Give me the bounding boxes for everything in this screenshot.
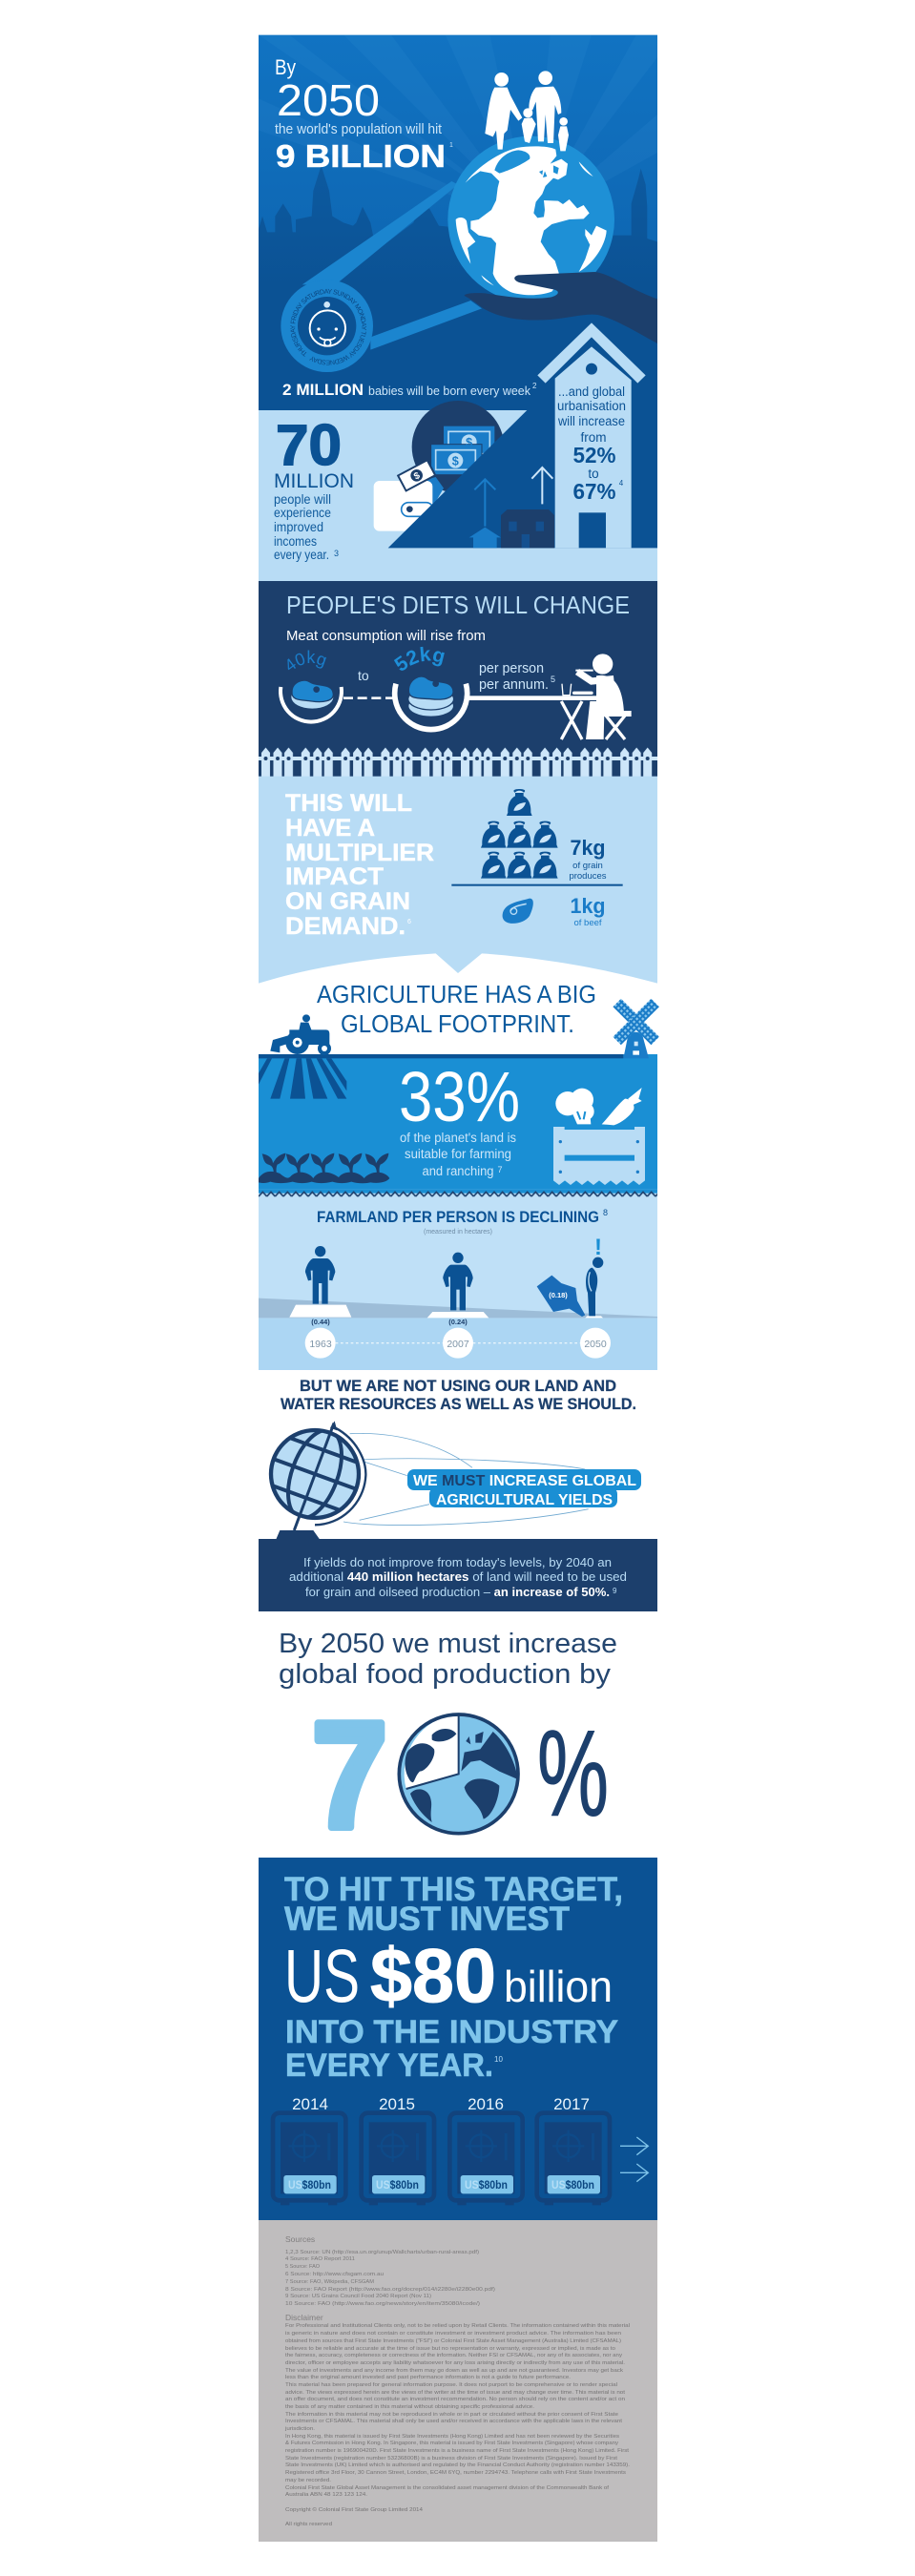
footnote 10: 10 <box>494 2055 503 2064</box>
icon: carrot <box>602 1088 642 1125</box>
source list <box>285 2250 495 2307</box>
hero artwork <box>259 34 657 410</box>
disclaimer text: Australia ABN 48 123 123 124. <box>285 2492 367 2498</box>
dark background <box>259 581 657 747</box>
text: planet's land: 7 <box>497 1165 503 1174</box>
light background and white curve <box>259 777 657 1063</box>
heading: disclaimer: Disclaimer <box>285 2313 323 2322</box>
icon: safe 2014 <box>273 2113 345 2205</box>
text: population: the world's population will hit <box>275 121 443 137</box>
disclaimer text: registration number is 196900420D. First State Investments is a business name of First State Investments (Hong Kong) Limited. First <box>285 2448 629 2454</box>
icon: windmill <box>613 999 659 1058</box>
text: improved incomes: incomes <box>274 534 317 549</box>
dashed link <box>343 695 396 702</box>
value 0.44: (0.44) <box>311 1318 330 1326</box>
stat: us$80 billion: billion <box>504 1962 613 2011</box>
heading: sources: Sources <box>285 2234 315 2244</box>
text: planet's land <box>400 1131 516 1178</box>
heading: land and water: BUT WE ARE NOT USING OUR LAND AND <box>300 1378 616 1395</box>
value pills <box>283 2175 600 2193</box>
stat: 7kg of grain: of grain <box>572 861 603 871</box>
icon: crate <box>553 1127 645 1185</box>
heading: diets: PEOPLE'S DIETS WILL CHANGE <box>286 591 630 619</box>
arrows <box>620 2137 648 2182</box>
text: urbanisation: 4 <box>619 479 624 488</box>
disclaimer text: director, officer or employee accepts any liability whatsoever for any loss arising directly or indirectly from any use of this material. <box>285 2360 625 2366</box>
value labels: US$80bn <box>551 2178 594 2192</box>
value 0.24: (0.24) <box>448 1318 468 1326</box>
figure: 2050 <box>586 1257 603 1316</box>
text: per person per annum: per person <box>479 661 544 676</box>
disclaimer text: an offer document, and does not constitute an investment recommendation. No person should rely on the content and/or act on <box>285 2397 625 2402</box>
percent sign: % <box>537 1706 609 1842</box>
value labels <box>288 2178 594 2192</box>
rights reserved: All rights reserved <box>285 2522 332 2527</box>
disclaimer text: & Futures Commission in Hong Kong. In Singapore, this material is issued by First State Investments (Singapore) whose company <box>285 2441 618 2446</box>
big year: 2050 <box>277 75 380 125</box>
stat: 7kg of grain <box>569 836 607 882</box>
panel: diets <box>259 581 657 747</box>
icon: bank notes: $ <box>452 454 459 467</box>
source list: 6 Source: http://www.cfsgam.com.au <box>285 2272 384 2277</box>
text: urbanisation: from <box>580 430 607 445</box>
heading: land and water: WATER RESOURCES AS WELL AS WE SHOULD. <box>281 1396 636 1413</box>
subheading: (measured in hectares) <box>424 1229 492 1236</box>
icon: ploughed furrows <box>259 1058 346 1099</box>
icon: tree <box>555 1089 594 1124</box>
farmland artwork <box>259 1190 657 1370</box>
source list: 1,2,3 Source: UN (http://esa.un.org/unup/Wallcharts/urban-rural-areas.pdf) <box>285 2250 479 2255</box>
text: urbanisation: ...and global <box>558 384 625 399</box>
source list: 9 Source: US Grains Council Food 2040 Report (Nov 11) <box>285 2294 431 2299</box>
grey background <box>259 2220 657 2542</box>
heading: farmland: FARMLAND PER PERSON IS DECLINING <box>317 1209 599 1226</box>
icon: bank notes: $ <box>466 436 472 449</box>
disclaimer text: For Professional and Institutional Clients only, not to be relied upon by Retail Clients. The information contained within this material <box>285 2323 630 2329</box>
disclaimer text: The information in this material may not be reproduced in whole or in part or circulated without the prior consent of First State <box>285 2412 618 2418</box>
icon: small steak plate <box>281 680 342 722</box>
text: babies: babies will be born every week <box>368 384 530 398</box>
safes and arrows artwork <box>273 2113 648 2205</box>
diet artwork <box>281 654 632 739</box>
globe <box>447 136 614 302</box>
disclaimer text: Investments or CFSAMAL. This material shall only be used and/or received in accordance with the applicable laws in the relevant <box>285 2419 622 2424</box>
stat label: million: MILLION <box>274 470 354 492</box>
disclaimer text: Colonial First State Global Asset Management is the consolidated asset management division of the Commonwealth Bank of <box>285 2485 609 2491</box>
heading: food production: global food production by <box>279 1659 612 1690</box>
icon: wallet: $ <box>412 470 423 483</box>
text: urbanisation <box>557 384 626 504</box>
icon: wallet <box>374 460 444 531</box>
icon: beef steak <box>503 899 533 924</box>
panel: incomes and urbanisation <box>259 322 657 581</box>
heading: hit target <box>284 1871 623 1938</box>
year labels: 2017 <box>553 2095 590 2113</box>
callout: increase yields <box>407 1469 641 1508</box>
icon: family on globe <box>485 71 569 151</box>
source list: 5 Source: FAO <box>285 2264 321 2270</box>
heading: multiplier: HAVE A <box>285 815 375 841</box>
disclaimer text: jurisdiction. <box>284 2426 315 2432</box>
panel: 70 percent <box>279 1629 617 1859</box>
text: urbanisation: 52% <box>572 443 616 467</box>
stat: babies: 2 MILLION <box>282 381 364 399</box>
source list: 10 Source: FAO (http://www.fao.org/news/story/en/item/35080/icode/) <box>285 2301 480 2307</box>
footnote 2: 2 <box>532 382 537 390</box>
text: meat consumption: Meat consumption will rise from <box>286 628 486 644</box>
text: urbanisation: urbanisation <box>557 399 626 413</box>
icon: safe 2017 <box>537 2113 610 2205</box>
icon: pointing hand <box>537 1276 585 1317</box>
panel: population hero <box>259 34 657 410</box>
panel: sources and disclaimer <box>259 2220 657 2542</box>
heading: multiplier: MULTIPLIER <box>285 840 434 866</box>
heading: hit target: TO HIT THIS TARGET, <box>284 1871 623 1908</box>
stat: 7kg of grain: produces <box>569 871 607 882</box>
heading: multiplier: 6 <box>407 919 411 925</box>
panel: diets: 40kg <box>287 651 326 670</box>
year labels: 2050 <box>584 1339 607 1350</box>
icon: globe as 70 percent pie <box>398 1714 519 1835</box>
heading: multiplier: THIS WILL <box>285 790 412 817</box>
heading: agriculture: GLOBAL FOOTPRINT. <box>341 1009 574 1038</box>
year labels <box>292 2095 590 2113</box>
disclaimer text: obtained from sources that First State Investments ("FSI") or Colonial First State Asset Management (Australia) Limited (CFSAMAL) <box>285 2338 621 2344</box>
icon: desk globe and connectors <box>269 1422 589 1539</box>
disclaimer text: less than the original amount invested and past performance information is not a guide to future performance. <box>285 2375 571 2380</box>
disclaimer text: believes to be reliable and accurate at the time of issue but no representation or warranty, expressed or implied, is made as to <box>285 2346 615 2352</box>
year labels: 2016 <box>468 2095 504 2113</box>
source list: 8 Source: FAO Report (http://www.fao.org/docrep/014/i2280e/i2280e00.pdf) <box>285 2287 495 2293</box>
panel: multiplier impact <box>259 777 657 1063</box>
text: urbanisation: to <box>588 467 599 481</box>
callout: increase yields: WE MUST INCREASE GLOBAL <box>413 1473 636 1489</box>
panel: farmland per person <box>259 1190 657 1370</box>
heading: multiplier <box>285 790 434 940</box>
icon: hand holding globe <box>465 272 657 343</box>
stat: us$80 billion <box>284 1933 613 2018</box>
icon: townhouse with arrow <box>501 467 554 548</box>
disclaimer text: State Investments (UK) Limited which is authorised and regulated by the Financial Conduct Authority (registration number 143359). <box>285 2462 630 2468</box>
panel: investment <box>259 1858 657 2220</box>
heading: agriculture: AGRICULTURE HAS A BIG <box>317 980 596 1008</box>
disclaimer text: is generic in nature and does not contain or constitute investment or investment product advice. The information has been <box>285 2331 621 2337</box>
icon: bank notes <box>431 426 494 475</box>
disclaimer text: Registered office 3rd Floor, 30 Cannon Street, London, EC4M 6YQ, number 2294743. Telephone calls with First State Investments <box>285 2470 626 2476</box>
disclaimer text: In Hong Kong, this material is issued by First State Investments (Hong Kong) Limited and has not been reviewed by the Securities <box>285 2434 619 2440</box>
dotted timeline <box>336 1341 580 1345</box>
heading: land and water <box>281 1378 636 1413</box>
heading: multiplier: IMPACT <box>285 863 384 890</box>
disclaimer text <box>284 2323 630 2498</box>
icon: sprouts <box>259 1153 389 1183</box>
stat: us$80 billion: $80 <box>370 1933 496 2018</box>
year labels <box>309 1339 607 1350</box>
text: improved incomes: people will <box>274 492 331 507</box>
stat: 70: 70 <box>276 413 342 477</box>
disclaimer text: This material has been prepared for general information purpose. It does not purport to be comprehensive or to render special <box>285 2382 617 2388</box>
text: improved incomes: experience <box>274 506 331 520</box>
heading: food production <box>279 1629 617 1690</box>
disclaimer text: advice. The views expressed herein are the views of the writer at the time of issue and may change over time. This material is not <box>285 2390 625 2396</box>
stat: 9 billion: 9 BILLION <box>276 138 446 174</box>
text: per person per annum: per annum. <box>479 677 549 693</box>
icon: urbanisation house <box>537 322 646 548</box>
decorative picket fence <box>259 747 657 777</box>
text: improved incomes: improved <box>274 520 323 534</box>
text: planet's land: and ranching <box>422 1164 494 1178</box>
icon: tractor <box>270 1014 331 1055</box>
disclaimer text: the basis of any matter contained in this material without obtaining specific professional advice. <box>285 2404 534 2410</box>
strap from baby ring to globe <box>302 181 482 350</box>
footnote 1: 1 <box>449 142 453 149</box>
value 0.18: (0.18) <box>549 1291 568 1299</box>
source list: 7 Source: FAO, Wikipedia, CFSGAM <box>285 2279 374 2285</box>
copyright: Copyright © Colonial First State Group Limited 2014 <box>285 2506 424 2513</box>
value labels: US$80bn <box>288 2178 331 2192</box>
heading: by 2050: By <box>275 55 296 79</box>
figure: 1963 <box>305 1246 335 1304</box>
footnote 8: 8 <box>603 1208 608 1217</box>
stat: 33%: 33% <box>399 1057 520 1136</box>
text: improved incomes <box>274 492 339 562</box>
stat: 1kg of beef <box>571 894 605 928</box>
stat: us$80 billion: US <box>284 1933 360 2018</box>
text: improved incomes: 3 <box>334 549 339 558</box>
icon: safe 2015 <box>362 2113 434 2205</box>
text: planet's land: of the planet's land is <box>400 1131 516 1145</box>
panel: 440 million hectares: additional 440 million hectares of land will need to be used <box>289 1569 627 1584</box>
panel: 440 million hectares: If yields do not improve from today's levels, by 2040 an <box>303 1555 612 1569</box>
disclaimer text: may be recorded. <box>285 2478 331 2483</box>
year labels: 1963 <box>309 1339 332 1350</box>
text: per person per annum: 5 <box>551 675 555 684</box>
heading: hit target: WE MUST INVEST <box>284 1901 570 1938</box>
callout: increase yields: AGRICULTURAL YIELDS <box>436 1492 613 1508</box>
disclaimer text: State Investments (registration number 53236800B) is a business division of First State Investments (Singapore). Issued by First <box>285 2456 617 2462</box>
stat: 1kg of beef: 1kg <box>571 894 605 918</box>
text: improved incomes: every year. <box>274 548 329 562</box>
year labels: 2007 <box>447 1339 469 1350</box>
divider line <box>451 884 623 886</box>
panel: diets: 52kg <box>394 647 445 671</box>
panel: agriculture footprint <box>259 980 659 1197</box>
panel: yields <box>251 1378 657 1611</box>
exclamation mark: ! <box>594 1235 602 1260</box>
stat: 1kg of beef: of beef <box>573 918 602 928</box>
heading: into the industry: INTO THE INDUSTRY <box>285 2014 618 2050</box>
value labels: US$80bn <box>376 2178 419 2192</box>
icon: large steak plate <box>395 676 468 730</box>
big digit 7: 7 <box>312 1692 387 1859</box>
figure: 2007 <box>443 1253 473 1310</box>
background <box>259 1858 657 2220</box>
text: urbanisation: 67% <box>572 479 616 504</box>
heading: agriculture <box>317 980 596 1038</box>
stat: 40kg <box>290 663 336 675</box>
stat: 52kg <box>401 661 458 674</box>
heading: multiplier: ON GRAIN <box>285 888 410 915</box>
panel: 440 million hectares: 9 <box>613 1587 617 1595</box>
panel: 440 million hectares <box>259 1539 657 1611</box>
lower farm artwork <box>259 1127 645 1185</box>
heading: multiplier: DEMAND. <box>285 913 406 940</box>
disclaimer text: The value of investments and any income from them may go down as well as up and are not guaranteed. Investors may get back <box>285 2368 623 2374</box>
year labels: 2015 <box>379 2095 415 2113</box>
icon: safe 2016 <box>449 2113 523 2205</box>
icon: baby ring with days of the week: THURSDAY FRIDAY SATURDAY SUNDAY MONDAY TUESDAY WEDNESDAY <box>290 288 366 364</box>
income artwork <box>259 401 657 581</box>
icon: small house with arrow <box>469 479 501 548</box>
icon: baby ring with days of the week <box>281 281 373 372</box>
heading: into the industry: EVERY YEAR. <box>285 2047 493 2084</box>
icon: person dining at table <box>465 654 632 739</box>
heading: into the industry <box>285 2014 618 2084</box>
farm artwork <box>259 999 659 1197</box>
disclaimer text: the fairness, accuracy, completeness or correctness of the information. Neither FSI or CFSAMAL, nor any of its associates, nor any <box>285 2353 622 2358</box>
value labels: US$80bn <box>465 2178 508 2192</box>
text: urbanisation: will increase <box>557 414 625 428</box>
text: per person per annum <box>479 661 555 693</box>
heading: food production: By 2050 we must increase <box>279 1629 617 1659</box>
icon: grain sacks <box>481 789 558 879</box>
source list: 4 Source: FAO Report 2011 <box>285 2256 355 2262</box>
stat: 7kg of grain: 7kg <box>571 836 605 860</box>
panel: 440 million hectares: for grain and oilseed production – an increase of 50%. <box>305 1585 610 1599</box>
text: to: to <box>358 668 369 683</box>
text: planet's land: suitable for farming <box>405 1147 511 1161</box>
year labels: 2014 <box>292 2095 328 2113</box>
